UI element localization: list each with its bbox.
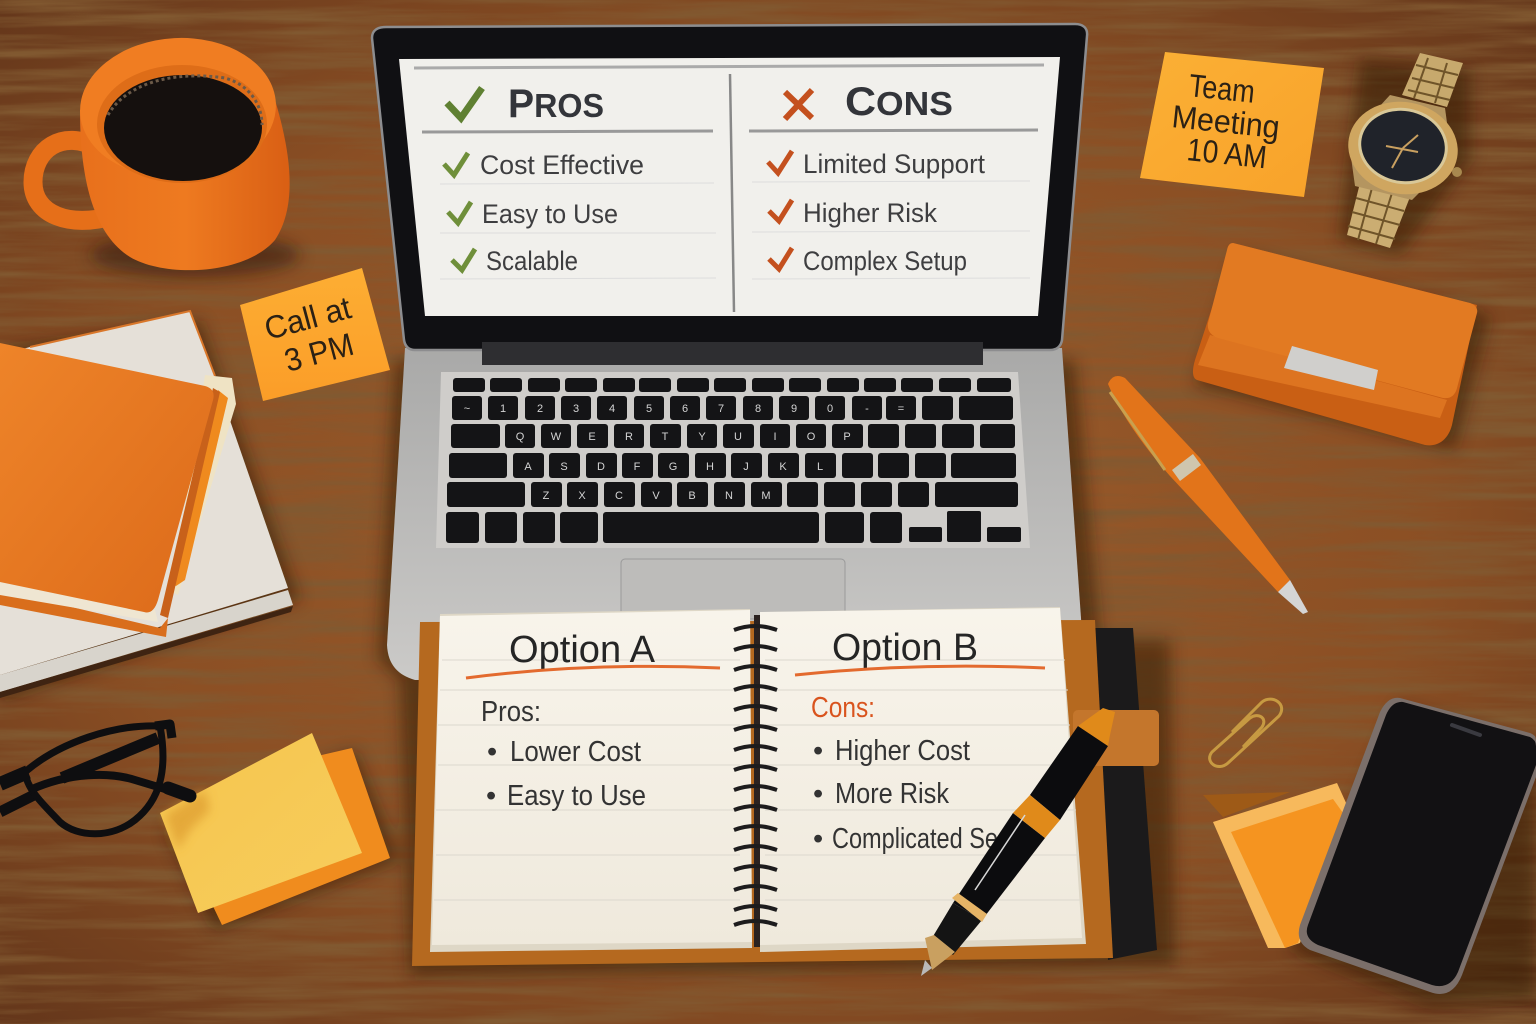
laptop lid	[372, 24, 1087, 350]
right page: option B: Option B	[832, 627, 978, 669]
heading: cons: CONS	[845, 80, 953, 124]
right page: option B: •	[813, 778, 823, 810]
laptop base	[387, 348, 1085, 680]
heading: cons	[785, 80, 953, 124]
sticky note: team meeting: Team	[1187, 67, 1257, 110]
cons list: Higher Risk	[803, 198, 937, 228]
spine and spiral binding	[734, 615, 777, 947]
orange and yellow sticky notes	[160, 733, 390, 925]
keyboard: QWERTYUIOP	[516, 431, 851, 443]
sticky note: team meeting: Meeting	[1170, 98, 1281, 145]
sticky note: call at 3 PM	[240, 268, 390, 401]
coffee mug	[33, 33, 300, 277]
right page: option B	[760, 607, 1086, 952]
right page: option B: More Risk	[835, 778, 949, 810]
cons list: Complex Setup	[803, 246, 967, 276]
keyboard: ASDFGHJKL	[524, 461, 823, 473]
keyboard	[436, 372, 1030, 548]
heading: pros: PROS	[508, 82, 604, 126]
left page: option A: Lower Cost	[510, 736, 641, 768]
cons list	[768, 149, 985, 276]
orange ballpoint pen	[1108, 376, 1308, 614]
left page: option A: Pros:	[481, 696, 541, 728]
hinge	[482, 342, 983, 365]
sticky note: team meeting: 10 AM	[1185, 131, 1269, 175]
sticky note: call at 3 PM: 3 PM	[280, 326, 357, 379]
pros and cons table	[414, 65, 1044, 312]
left page: option A: Option A	[509, 629, 656, 671]
black glasses	[0, 724, 190, 834]
right page: option B: Complicated Se	[832, 823, 998, 855]
pros list: Scalable	[486, 246, 578, 276]
pros list	[444, 150, 644, 276]
sticky note: team meeting	[1140, 52, 1324, 197]
stacked notebooks	[0, 311, 293, 698]
left page: option A: •	[486, 780, 496, 812]
right page: option B: Cons:	[811, 692, 875, 724]
pros list: Cost Effective	[480, 150, 644, 180]
pros list: Easy to Use	[482, 199, 618, 229]
right page: option B: Higher Cost	[835, 735, 970, 767]
left page: option A: Easy to Use	[507, 780, 646, 812]
left page: option A: •	[487, 736, 497, 768]
left page: option A	[430, 609, 752, 952]
open spiral notebook	[412, 607, 1159, 976]
cons list: Limited Support	[803, 149, 985, 179]
right page: option B: •	[813, 823, 823, 855]
orange sticky notes under phone	[1203, 783, 1347, 948]
trackpad	[621, 559, 845, 619]
strap	[1073, 710, 1159, 766]
sticky note: call at 3 PM: Call at	[260, 289, 355, 347]
keyboard: ZXCVBNM	[543, 490, 771, 502]
heading: pros	[447, 82, 604, 126]
wristwatch	[1341, 53, 1465, 248]
smartphone	[1299, 698, 1536, 994]
screen	[399, 57, 1060, 316]
laptop	[372, 24, 1087, 680]
right page: option B: •	[813, 735, 823, 767]
paperclip	[1210, 699, 1282, 767]
fountain pen	[921, 708, 1115, 976]
keyboard: ~1234567890-=	[464, 403, 904, 415]
orange wallet	[1193, 243, 1477, 445]
